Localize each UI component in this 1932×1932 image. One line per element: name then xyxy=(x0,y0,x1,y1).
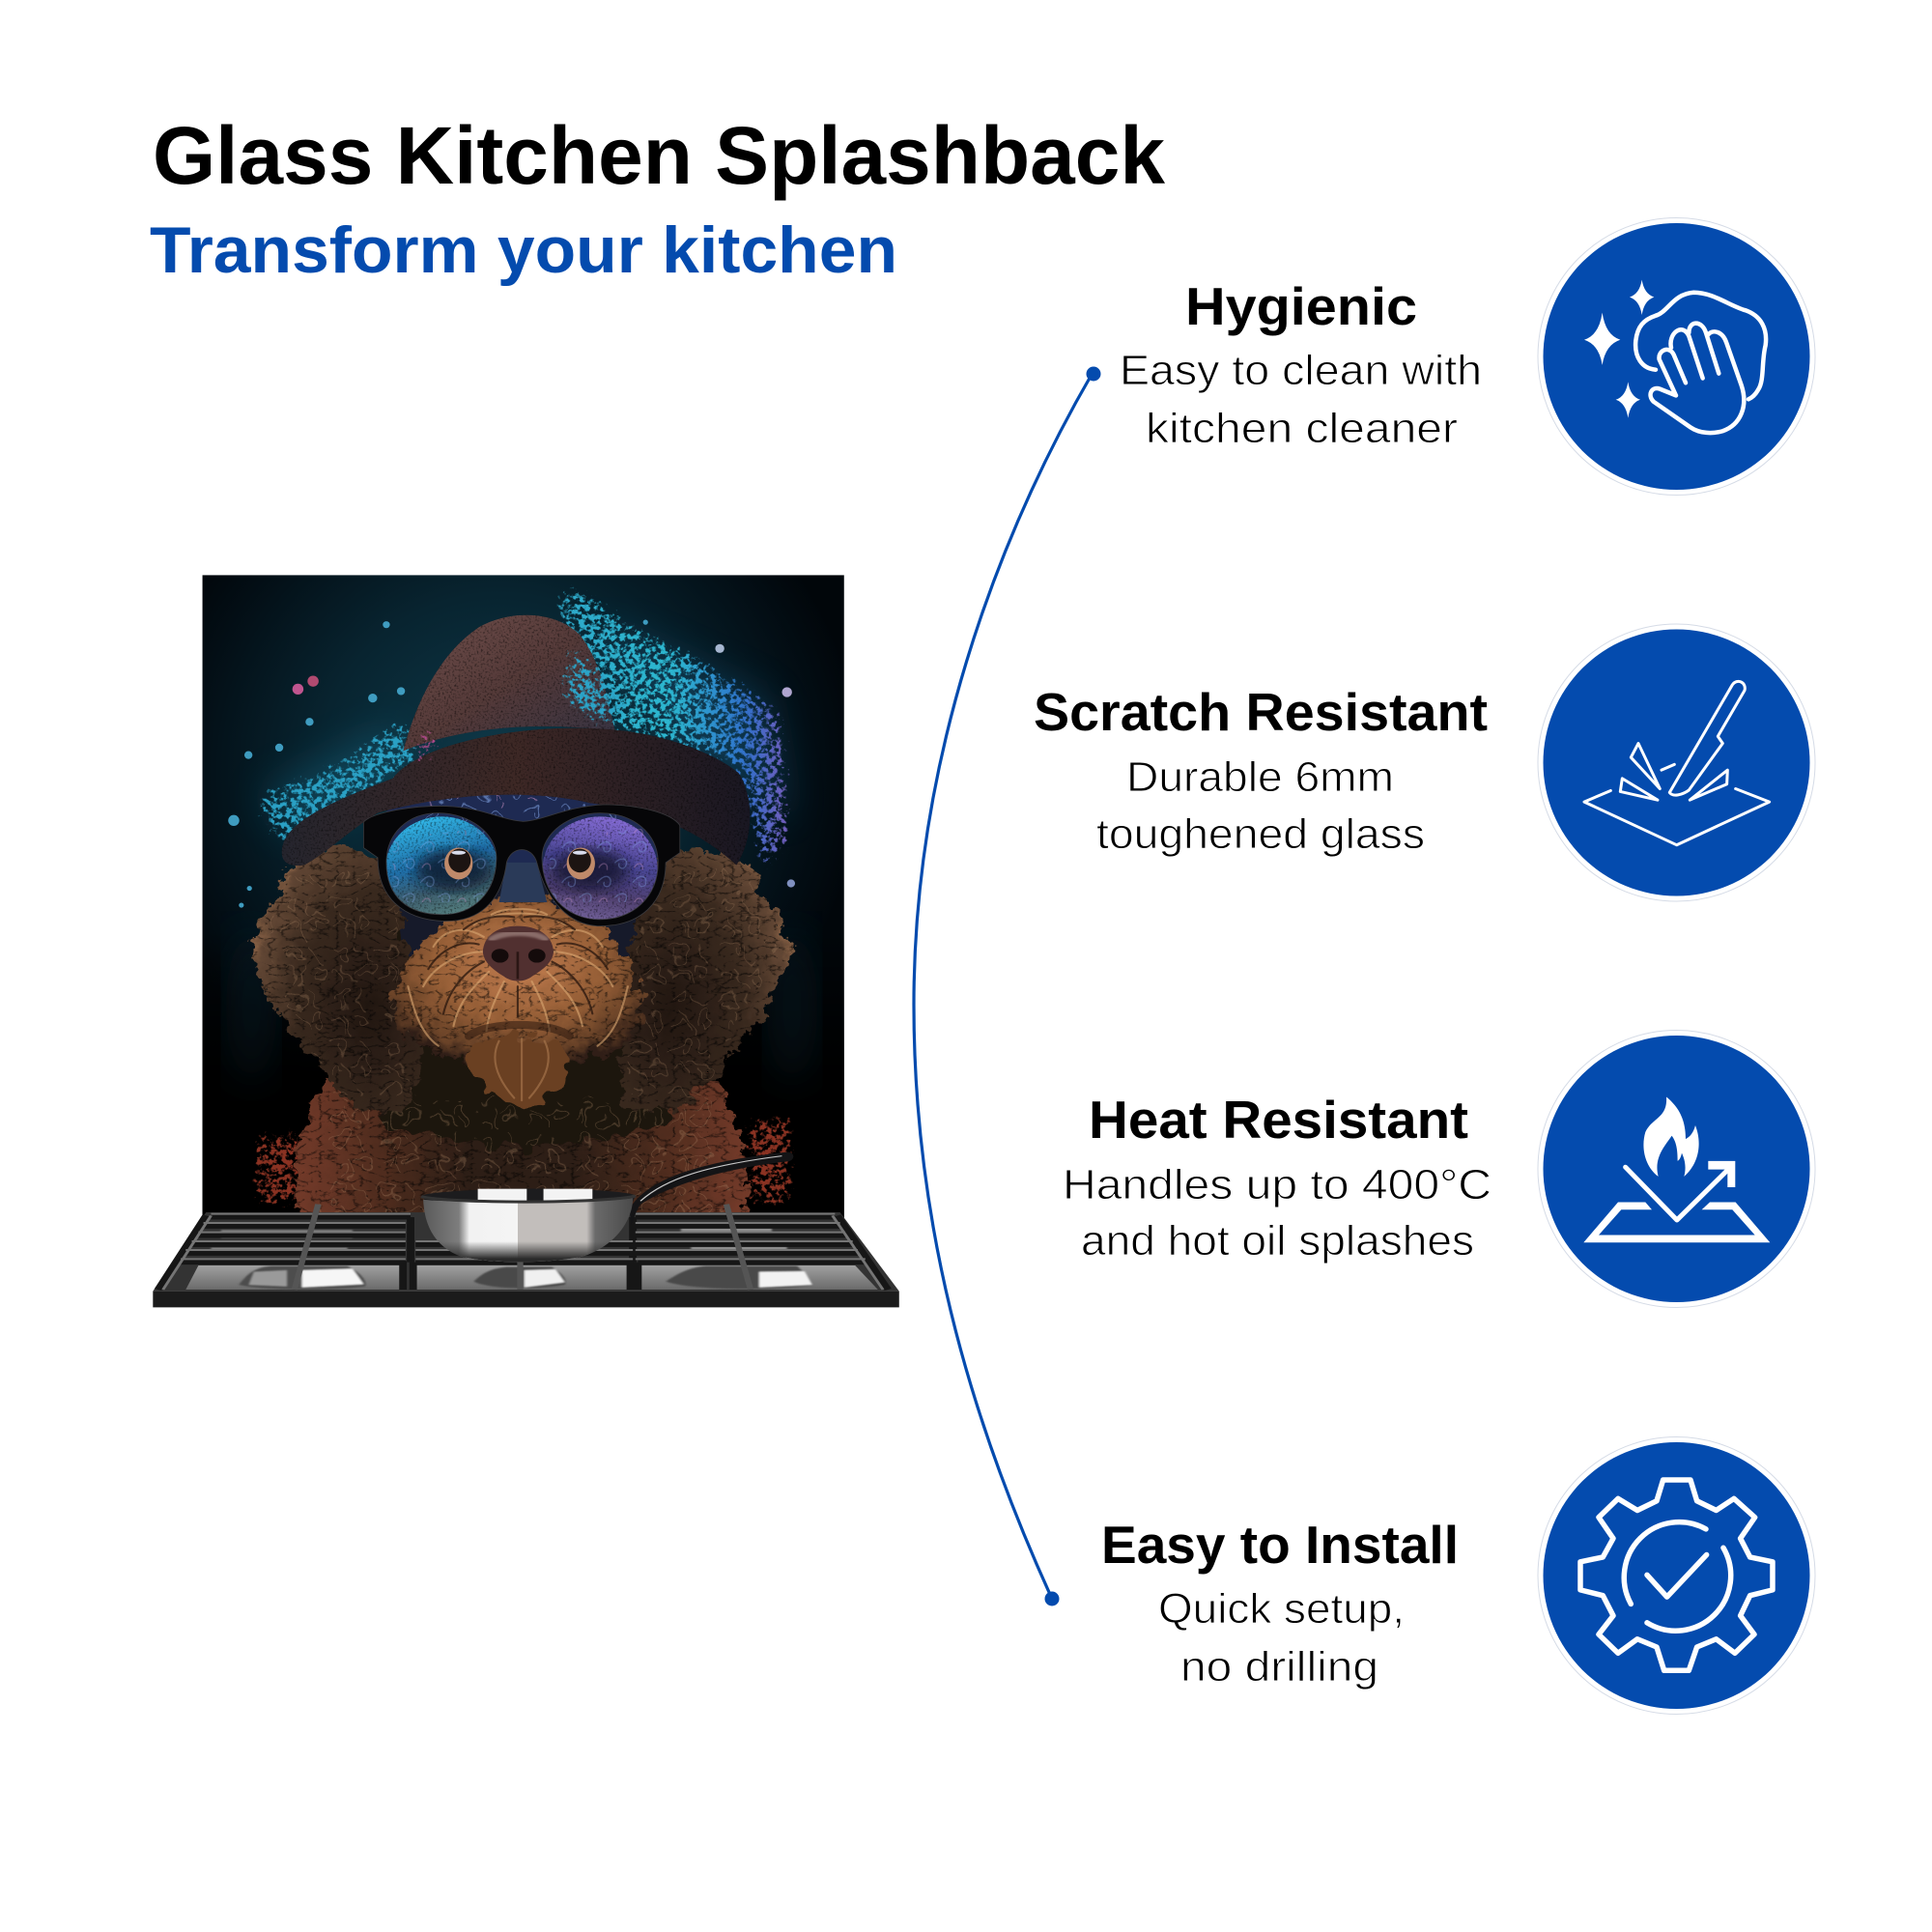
burner trays xyxy=(185,1265,878,1290)
grate rails xyxy=(158,1215,888,1290)
right eye xyxy=(567,848,595,879)
description xyxy=(1158,1585,1405,1690)
feature: heat resistant xyxy=(1063,1090,1492,1264)
pan interior xyxy=(422,1189,636,1202)
subtitle: Transform your kitchen xyxy=(150,213,897,287)
description: toughened glass xyxy=(1096,810,1425,858)
frying pan xyxy=(421,1152,793,1262)
glasses xyxy=(363,805,680,926)
heading: Scratch Resistant xyxy=(1034,682,1488,742)
neck base xyxy=(378,897,670,1149)
cloth xyxy=(1635,293,1766,399)
description: Durable 6mm xyxy=(1126,753,1394,801)
hat splash xyxy=(408,635,640,774)
droplets xyxy=(228,620,795,908)
panel: dog artwork xyxy=(203,575,844,1222)
glass shards xyxy=(1620,744,1727,800)
beard xyxy=(471,1036,572,1108)
front edge xyxy=(153,1292,899,1307)
sparkles xyxy=(1584,280,1654,418)
artwork background xyxy=(203,575,844,1219)
inner ring xyxy=(1624,1522,1731,1631)
gas hob xyxy=(153,1152,899,1307)
left eye xyxy=(444,848,472,879)
right lens xyxy=(543,816,658,921)
flame xyxy=(1643,1096,1699,1177)
hot surface xyxy=(1583,1203,1770,1242)
icon: heat resistant flame xyxy=(1538,1030,1815,1308)
feature: hygienic xyxy=(1120,276,1482,452)
feature: scratch resistant xyxy=(1034,682,1488,858)
chest fur xyxy=(296,1047,747,1222)
heading: Heat Resistant xyxy=(1089,1090,1468,1150)
vertical grate bars xyxy=(295,1205,751,1290)
hat crown xyxy=(403,615,615,752)
gear outline xyxy=(1580,1480,1773,1670)
pan handle xyxy=(629,1152,793,1225)
product image: splashback with dog artwork above hob xyxy=(153,575,899,1307)
nose bridge fur xyxy=(499,863,547,902)
glass plate xyxy=(1584,789,1770,845)
connector curve xyxy=(914,367,1101,1605)
description xyxy=(1120,347,1482,452)
description: no drilling xyxy=(1180,1643,1378,1690)
description: kitchen cleaner xyxy=(1146,405,1458,452)
left ear xyxy=(252,848,419,1111)
heading: Hygienic xyxy=(1185,276,1417,336)
left lens xyxy=(385,816,498,921)
muzzle fur strands xyxy=(408,909,628,1046)
feature: easy to install xyxy=(1101,1515,1459,1690)
icon: hygienic hand wiping xyxy=(1538,218,1815,495)
pan rim xyxy=(421,1196,636,1202)
muzzle xyxy=(394,895,640,1061)
hob top surface xyxy=(153,1212,899,1292)
right ear xyxy=(619,848,791,1111)
knife xyxy=(1669,681,1745,795)
description: Easy to clean with xyxy=(1120,347,1482,394)
icon: easy to install gear xyxy=(1538,1437,1815,1714)
check mark xyxy=(1647,1555,1707,1597)
chest curls xyxy=(317,1100,731,1219)
frame xyxy=(363,805,680,926)
hat brim xyxy=(282,728,750,866)
forehead fur xyxy=(383,774,676,917)
hand xyxy=(1651,324,1744,433)
description: and hot oil splashes xyxy=(1081,1217,1474,1264)
face under glasses xyxy=(393,867,650,956)
description: Handles up to 400°C xyxy=(1063,1161,1492,1208)
deflection arrow xyxy=(1626,1167,1729,1220)
pan body xyxy=(423,1198,633,1262)
description xyxy=(1096,753,1425,858)
connector dot top xyxy=(1086,367,1101,381)
nose xyxy=(483,926,554,981)
burners xyxy=(211,1227,812,1290)
splash glow xyxy=(262,620,787,838)
title: Glass Kitchen Splashback xyxy=(153,110,1165,201)
description xyxy=(1063,1161,1492,1264)
icon: scratch resistant knife xyxy=(1538,624,1815,901)
paint splash xyxy=(249,581,797,1209)
connector dot bottom xyxy=(1045,1592,1059,1605)
heading: Easy to Install xyxy=(1101,1515,1459,1575)
description: Quick setup, xyxy=(1158,1585,1405,1633)
